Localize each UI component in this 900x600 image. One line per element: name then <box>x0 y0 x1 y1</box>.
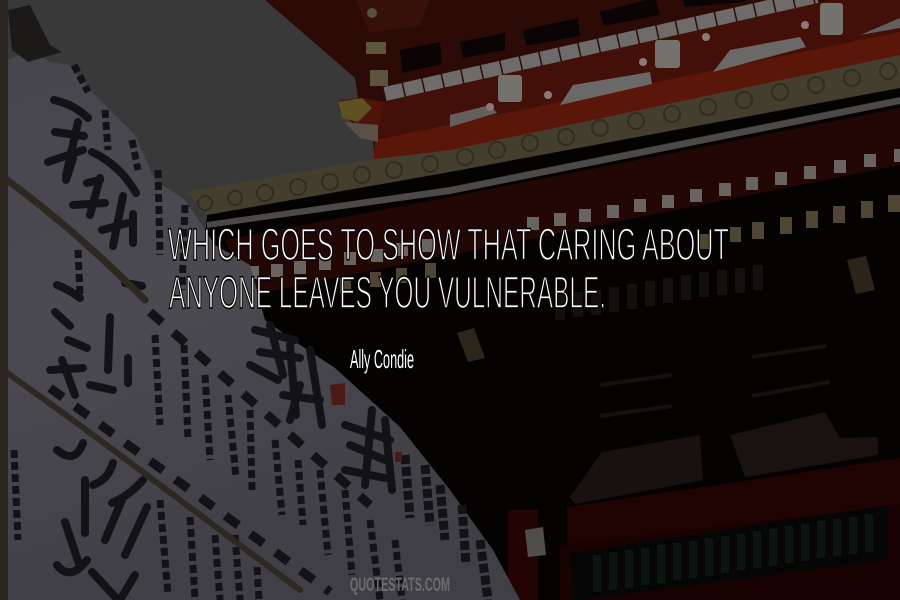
background: post and top-left leaves <box>0 0 62 600</box>
quote text <box>168 219 729 318</box>
quote poster: Ally Condie <box>350 344 414 374</box>
lantern calligraphy <box>14 65 488 600</box>
watermark: QUOTESTATS.COM <box>350 575 450 596</box>
background: upper temple roof <box>265 0 900 165</box>
background: dark temple body <box>200 88 900 600</box>
background: lower temple panels and window <box>508 412 900 600</box>
background: ropes <box>0 175 300 590</box>
background: paper lanterns <box>8 50 520 600</box>
background: roof tile strip <box>187 55 900 215</box>
